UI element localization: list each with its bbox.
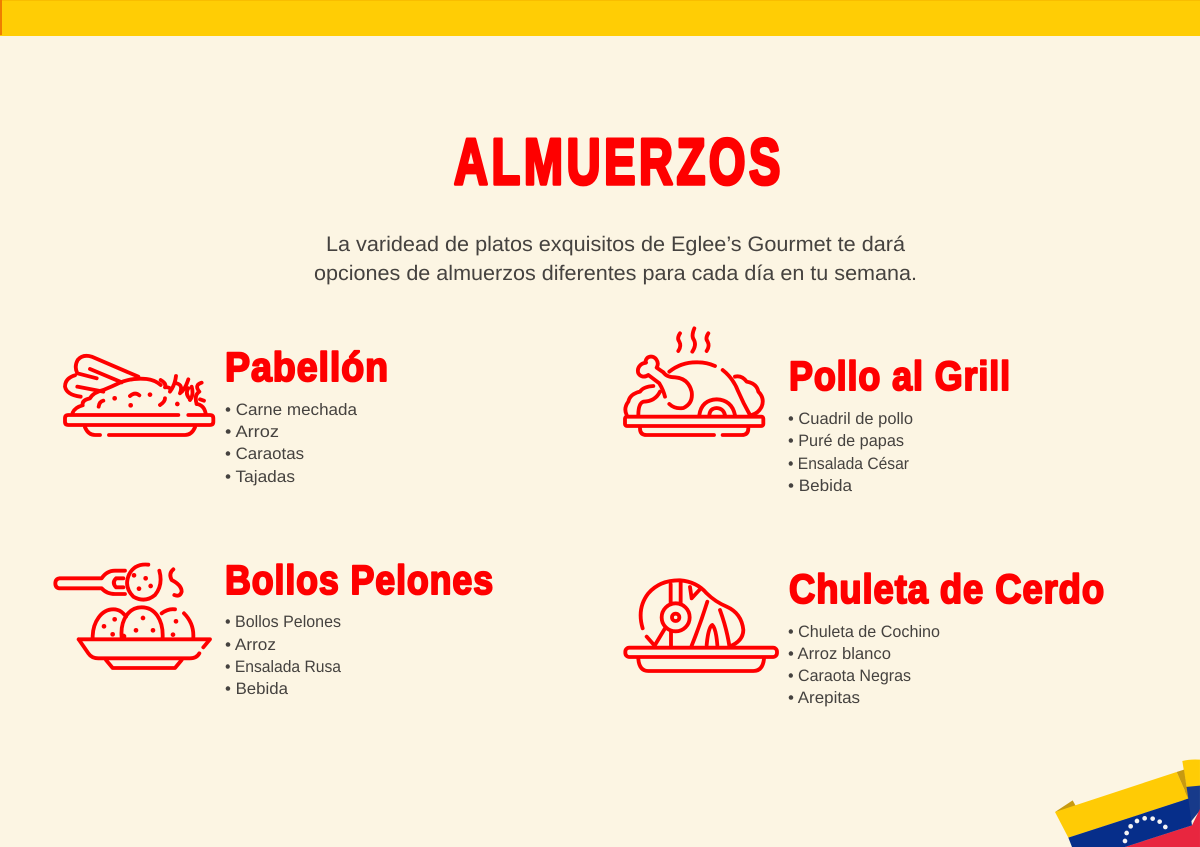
icon: Venezuelan flag ribbon [1055, 759, 1200, 847]
intro text: La varidead de platos exquisitos de Eglee’s Gourmet te dará [326, 233, 905, 256]
ingredient list: • Arroz blanco [788, 645, 891, 663]
ingredient list: • Arepitas [788, 689, 860, 707]
ingredient list: • Bebida [225, 680, 289, 698]
icon: pork chop [625, 580, 777, 671]
ingredient list: • Caraotas [225, 445, 304, 463]
ingredient list: • Bollos Pelones [225, 613, 341, 631]
top yellow band [0, 0, 1200, 36]
ingredient list: • Chuleta de Cochino [788, 623, 940, 641]
icon: meatballs and fork [55, 565, 210, 668]
heading: Pollo al Grill [789, 353, 1011, 399]
ingredient list [225, 613, 342, 698]
ingredient list [788, 410, 913, 495]
ingredient list: • Cuadril de pollo [788, 410, 913, 428]
icon: roast chicken [625, 328, 763, 435]
ingredient list: • Ensalada Rusa [225, 658, 342, 676]
ingredient list: • Caraota Negras [788, 667, 911, 685]
panel: Chuleta de Cerdo [625, 566, 1105, 707]
icon: rice and plantains plate [65, 356, 213, 435]
ingredient list: • Carne mechada [225, 401, 358, 419]
intro text: opciones de almuerzos diferentes para cada día en tu semana. [314, 262, 917, 285]
ingredient list: • Puré de papas [788, 432, 904, 450]
ingredient list [788, 623, 940, 707]
ingredient list: • Bebida [788, 477, 853, 495]
ingredient list: • Arroz [225, 423, 279, 441]
panel: Pollo al Grill [625, 328, 1011, 495]
heading: Chuleta de Cerdo [789, 566, 1105, 612]
ingredient list: • Tajadas [225, 468, 295, 486]
ingredient list [225, 401, 358, 486]
panel: Bollos Pelones [55, 557, 494, 698]
ingredient list: • Arroz [225, 636, 276, 654]
ingredient list: • Ensalada César [788, 455, 909, 473]
heading: Bollos Pelones [225, 557, 494, 603]
intro text [314, 233, 917, 285]
panel: Pabellón [65, 344, 389, 486]
title: ALMUERZOS [454, 125, 784, 198]
heading: Pabellón [225, 344, 389, 390]
